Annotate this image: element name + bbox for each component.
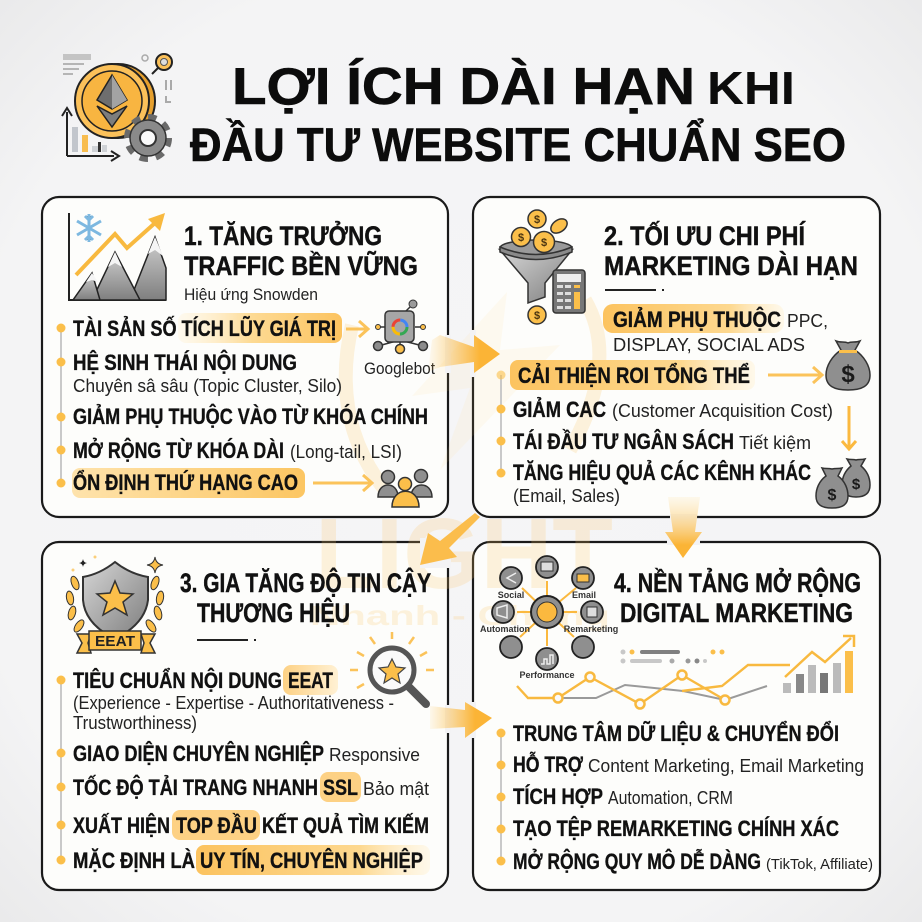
list 2: GIẢM PHỤ THUỘC xyxy=(613,307,781,332)
heading 3: 3. GIA TĂNG ĐỘ TIN CẬY xyxy=(180,567,431,598)
list 3: SSL xyxy=(323,775,358,800)
list 3: Responsive xyxy=(329,744,420,765)
list 3: TIÊU CHUẨN NỘI DUNG xyxy=(73,668,282,693)
icon: audience xyxy=(378,470,432,507)
panel: benefit 1 background xyxy=(42,197,448,517)
watermark: LIGHT xyxy=(315,498,613,610)
list 2: PPC, xyxy=(787,310,828,331)
heading 1 xyxy=(184,219,418,281)
panel: 1 content xyxy=(56,213,435,507)
icon: funnel with coins and calculator xyxy=(500,210,585,324)
list 4: (TikTok, Affiliate) xyxy=(766,856,873,873)
icon: mountain growth chart xyxy=(69,213,166,300)
icon: money bags small: $ xyxy=(852,476,861,493)
panel: 2 content xyxy=(496,210,870,508)
heading 2: 2. TỐI ƯU CHI PHÍ xyxy=(604,219,806,251)
list 4 xyxy=(513,721,873,874)
diagram: digital marketing hub xyxy=(480,556,618,680)
heading 4: 4. NỀN TẢNG MỞ RỘNG xyxy=(614,566,861,598)
subheading 1: Hiệu ứng Snowden xyxy=(184,285,318,304)
list 2: (Customer Acquisition Cost) xyxy=(612,400,833,421)
list 4: Automation, CRM xyxy=(608,787,733,808)
list 1: HỆ SINH THÁI NỘI DUNG xyxy=(73,350,297,375)
list 4: TẠO TỆP REMARKETING CHÍNH XÁC xyxy=(513,816,839,841)
heading 2: MARKETING DÀI HẠN xyxy=(604,250,858,281)
highlight: giảm phụ thuộc xyxy=(603,304,784,333)
bullet rail 2 xyxy=(496,370,506,478)
list 2: (Email, Sales) xyxy=(513,485,620,506)
list 3: Trustworthiness) xyxy=(73,712,197,733)
icon: ethereum coin with gear and chart xyxy=(62,54,172,161)
icon: funnel with coins and calculator: $ xyxy=(518,232,524,244)
heading 4 xyxy=(614,566,861,628)
list 1: MỞ RỘNG TỪ KHÓA DÀI xyxy=(73,438,284,463)
title: KHI xyxy=(707,62,795,114)
highlight: ổn định xyxy=(72,468,305,498)
icon: funnel with coins and calculator: $ xyxy=(534,310,540,322)
heading 2 xyxy=(604,219,858,281)
icon: EEAT shield xyxy=(65,556,165,653)
list 4: HỖ TRỢ xyxy=(513,751,583,777)
diagram: digital marketing hub: Performance xyxy=(519,670,575,680)
list 3: XUẤT HIỆN xyxy=(73,813,170,838)
bullet rail 4 xyxy=(496,728,506,866)
diagram: digital marketing hub: Email xyxy=(572,590,596,600)
arrow: to googlebot xyxy=(346,321,368,337)
list 2 xyxy=(513,307,833,506)
icon: googlebot xyxy=(374,300,428,354)
list 4: Content Marketing, Email Marketing xyxy=(588,755,864,776)
highlights 3 xyxy=(172,665,430,875)
heading 3: THƯƠNG HIỆU xyxy=(197,597,350,628)
list 1: (Long-tail, LSI) xyxy=(290,441,402,462)
list 1: Chuyên sâ sâu (Topic Cluster, Silo) xyxy=(73,375,342,396)
arrow: down to small bags xyxy=(842,406,856,449)
bullet rail 1 xyxy=(56,324,66,488)
watermark: Nhanh - Chóng xyxy=(310,600,610,631)
bullet rail 3 xyxy=(56,676,66,864)
list 2: TĂNG HIỆU QUẢ CÁC KÊNH KHÁC xyxy=(513,460,811,485)
list 3: MẶC ĐỊNH LÀ xyxy=(73,848,195,873)
icon: money bags small: $ xyxy=(828,487,837,504)
panel: 4 content xyxy=(480,556,873,874)
label: googlebot: Googlebot xyxy=(364,359,435,378)
list 3: KẾT QUẢ TÌM KIẾM xyxy=(262,813,429,838)
list 2: TÁI ĐẦU TƯ NGÂN SÁCH xyxy=(513,429,734,454)
diagram: digital marketing hub: Social xyxy=(498,590,524,600)
panel: benefit 3 background xyxy=(42,542,448,890)
icon: funnel with coins and calculator: $ xyxy=(541,237,547,249)
list 3: (Experience - Expertise - Authoritativeness - xyxy=(73,692,394,713)
panel: benefit 4 background xyxy=(473,542,880,890)
list 4: TÍCH HỢP xyxy=(513,784,603,809)
list 1: TÀI SẢN SỐ TÍCH LŨY GIÁ TRỊ xyxy=(73,315,336,341)
diagram: digital marketing hub: Automation xyxy=(480,624,530,634)
heading 4: DIGITAL MARKETING xyxy=(620,598,853,628)
title xyxy=(190,58,846,171)
arrow: to money bag xyxy=(768,367,822,383)
watermark xyxy=(310,292,613,631)
list 3: TOP ĐẦU xyxy=(176,813,257,838)
border gaps behind arrows xyxy=(420,330,700,738)
title: LỢI ÍCH DÀI HẠN xyxy=(232,58,695,116)
list 2: Tiết kiệm xyxy=(739,432,811,453)
arrow: panel 2 to panel 3 xyxy=(420,513,480,565)
list 4: TRUNG TÂM DỮ LIỆU & CHUYỂN ĐỔI xyxy=(513,721,839,746)
list 1: GIẢM PHỤ THUỘC VÀO TỪ KHÓA CHÍNH xyxy=(73,404,428,429)
panel: 3 content xyxy=(56,556,434,875)
list 1: ỔN ĐỊNH THỨ HẠNG CAO xyxy=(73,470,298,495)
list 2: DISPLAY, SOCIAL ADS xyxy=(613,334,805,355)
list 3: EEAT xyxy=(288,668,333,693)
list 2: CẢI THIỆN ROI TỔNG THỂ xyxy=(518,363,750,388)
icon: magnifier with star xyxy=(350,632,434,704)
icon: money bag large xyxy=(826,341,870,390)
diagram: digital marketing hub: Remarketing xyxy=(564,624,618,634)
arrow: panel 3 to panel 4 xyxy=(430,702,492,738)
arrow: panel 2 to panel 4 xyxy=(665,497,702,558)
highlight: tài sản xyxy=(178,313,342,343)
chart: growth lines and bars xyxy=(517,636,854,708)
list 3: UY TÍN, CHUYÊN NGHIỆP xyxy=(200,848,423,873)
icon: funnel with coins and calculator: $ xyxy=(534,214,540,226)
list 1 xyxy=(73,315,428,495)
heading 1: 1. TĂNG TRƯỞNG xyxy=(184,219,382,251)
heading 1: TRAFFIC BỀN VỮNG xyxy=(184,250,418,281)
icon: money bags small xyxy=(816,459,870,508)
divider 3 xyxy=(197,639,256,641)
arrow: panel 1 to panel 2 xyxy=(428,335,500,373)
icon: EEAT shield: EEAT xyxy=(95,633,135,650)
icon: money bag large: $ xyxy=(841,361,855,388)
list 2: GIẢM CAC xyxy=(513,397,606,422)
panel: benefit 2 background xyxy=(473,197,880,517)
list 3: TỐC ĐỘ TẢI TRANG NHANH xyxy=(73,774,318,800)
highlight: cải thiện roi xyxy=(510,360,755,390)
list 4: MỞ RỘNG QUY MÔ DỄ DÀNG xyxy=(513,848,761,874)
list 3: Bảo mật xyxy=(363,778,429,799)
heading 3 xyxy=(180,567,431,628)
divider 2 xyxy=(605,289,664,291)
list 3 xyxy=(73,668,429,873)
arrow: to audience xyxy=(313,475,372,491)
list 3: GIAO DIỆN CHUYÊN NGHIỆP xyxy=(73,741,324,766)
title: ĐẦU TƯ WEBSITE CHUẨN SEO xyxy=(190,118,846,171)
